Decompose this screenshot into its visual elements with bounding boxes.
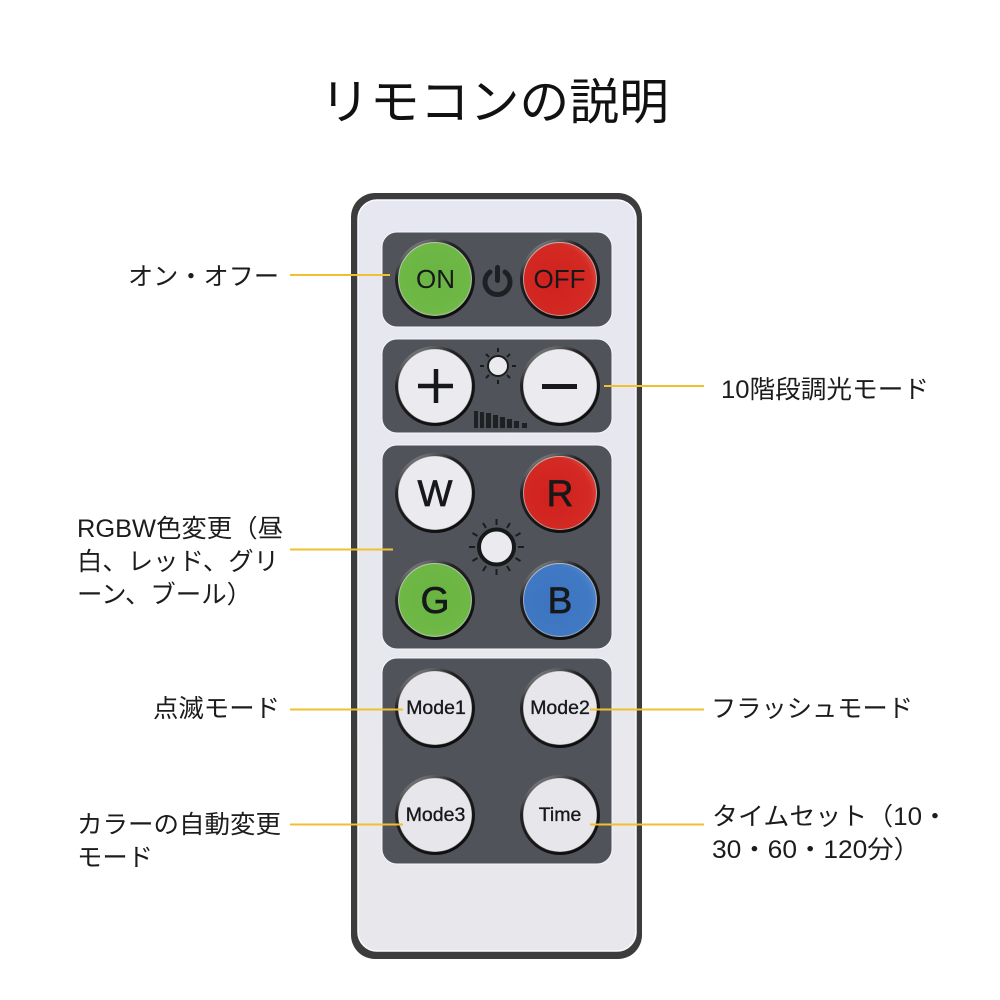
label: colours: RGBW色変更（昼 <box>77 515 283 543</box>
title: リモコンの説明 <box>320 76 669 130</box>
button: OFF <box>520 239 600 319</box>
button: W: W <box>418 473 453 514</box>
label: colours <box>77 515 283 609</box>
icon: small sun <box>480 348 516 384</box>
leader line: mode1 <box>290 708 403 710</box>
remote body <box>351 193 642 959</box>
label: auto colour change <box>77 811 281 872</box>
label: time set <box>712 803 948 864</box>
button: Mode1 <box>395 668 475 748</box>
button: ON <box>395 239 475 319</box>
button: ON: ON <box>416 264 455 294</box>
icon: power <box>485 268 510 294</box>
remote control <box>351 193 642 959</box>
leader line: time <box>590 824 704 826</box>
label: time set: 30・60・120分） <box>712 836 920 864</box>
button: plus <box>395 346 475 426</box>
label: flashing mode: 点滅モード <box>153 695 280 723</box>
button: Mode1: Mode1 <box>406 697 466 719</box>
button: Mode2: Mode2 <box>530 697 590 719</box>
leader line: mode3 <box>290 824 403 826</box>
button: Mode3 <box>395 775 475 855</box>
button: B: B <box>548 580 572 621</box>
button: Mode2 <box>520 668 600 748</box>
button: G: G <box>421 580 449 621</box>
leader line: colours <box>290 548 393 550</box>
label: auto colour change: カラーの自動変更 <box>77 811 281 839</box>
button: Time <box>520 775 600 855</box>
button: R: R <box>547 473 573 514</box>
label: dimming: 10階段調光モード <box>721 376 929 404</box>
label: auto colour change: モード <box>77 844 153 872</box>
label: time set: タイムセット（10・ <box>712 803 948 831</box>
button: W <box>395 453 475 533</box>
button: minus <box>520 346 600 426</box>
button: Time: Time <box>539 804 581 826</box>
leader line: on off <box>290 274 390 276</box>
button: Mode3: Mode3 <box>406 804 465 826</box>
panel: brightness <box>382 339 612 433</box>
leader line: mode2 <box>590 708 704 710</box>
label: flash mode: フラッシュモード <box>711 695 913 723</box>
icon: brightness bars <box>474 411 527 428</box>
panel: modes <box>382 658 612 864</box>
label: on off: オン・オフー <box>128 263 279 291</box>
button: G <box>395 560 475 640</box>
leader line: dimming <box>604 385 704 387</box>
button: OFF: OFF <box>534 264 586 294</box>
label: colours: 白、レッド、グリ <box>77 548 279 576</box>
button: R <box>520 453 600 533</box>
label: colours: ーン、ブール） <box>77 581 252 609</box>
icon: large sun <box>469 519 524 575</box>
panel: colours <box>382 445 612 649</box>
button: B <box>520 560 600 640</box>
panel: power <box>382 232 612 327</box>
